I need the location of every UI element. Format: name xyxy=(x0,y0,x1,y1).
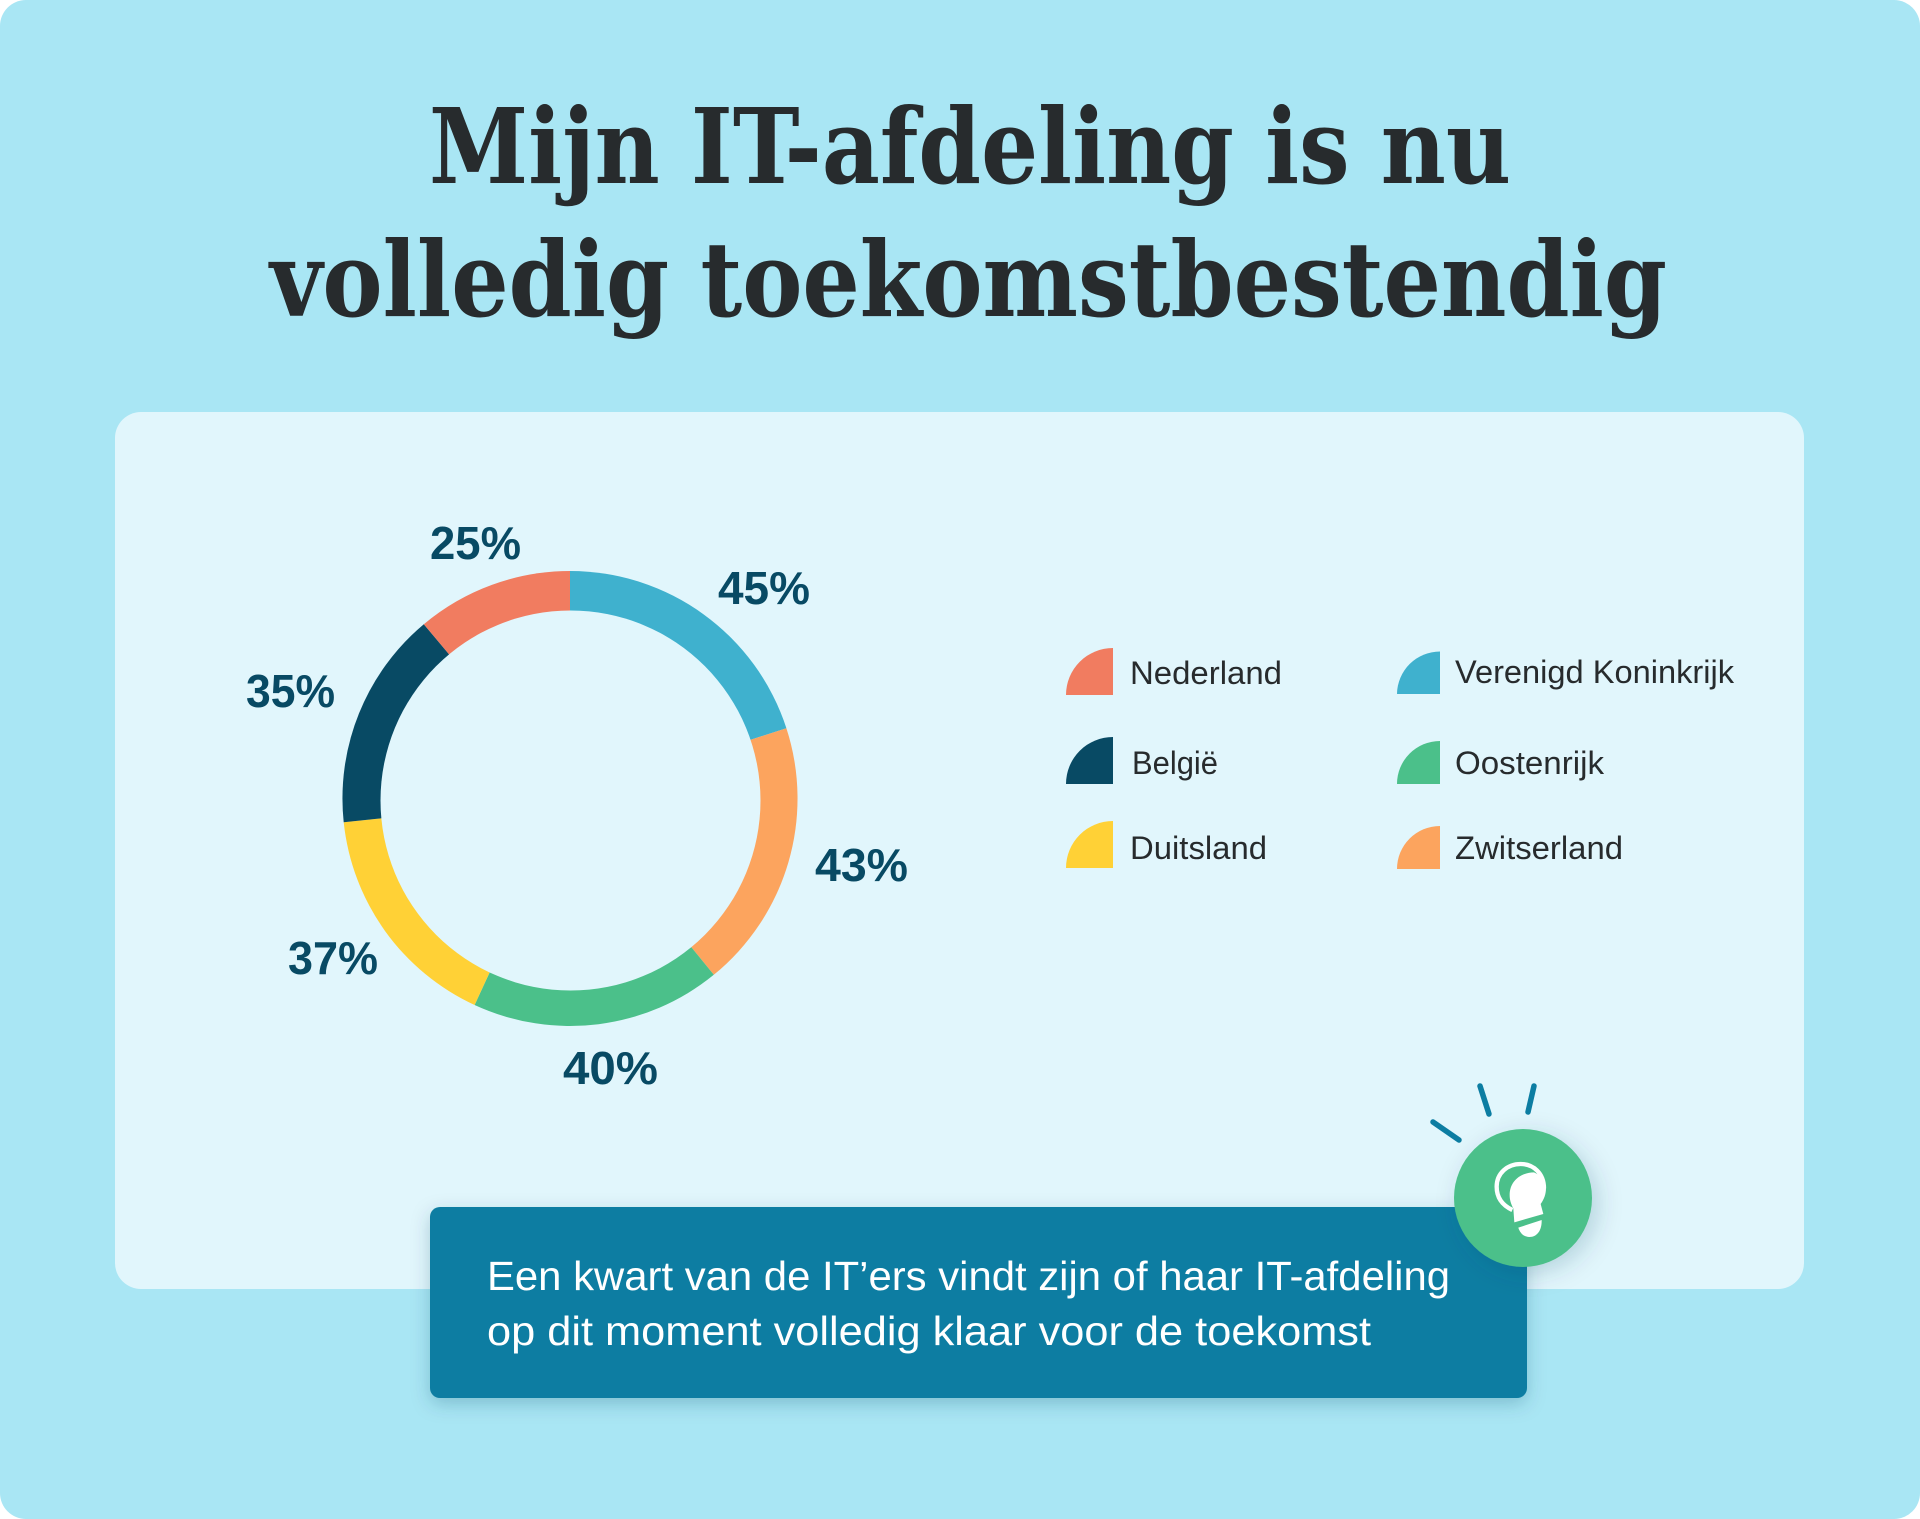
percentage labels: 43% xyxy=(815,839,908,891)
legend item: Duitsland: Duitsland xyxy=(1130,830,1267,866)
segment: Duitsland 37% xyxy=(344,798,570,1005)
segment: Verenigd Koninkrijk 45% xyxy=(570,571,786,798)
segment: Zwitserland 43% xyxy=(570,728,798,975)
callout: Een kwart van de IT’ers vindt zijn of haar IT-afdeling xyxy=(487,1253,1450,1299)
legend item: Oostenrijk: Oostenrijk xyxy=(1455,745,1605,781)
legend xyxy=(1066,648,1735,869)
percentage labels: 40% xyxy=(563,1042,658,1094)
panel: chart and legend xyxy=(115,412,1804,1289)
donut chart xyxy=(342,571,798,1026)
segment: België 35% xyxy=(342,624,570,822)
percentage labels xyxy=(246,517,908,1094)
segment: Oostenrijk 40% xyxy=(475,798,714,1026)
icon: light bulb badge xyxy=(1454,1129,1592,1267)
callout xyxy=(430,1207,1527,1398)
legend item: Zwitserland xyxy=(1397,826,1623,869)
icon: light rays xyxy=(1433,1086,1534,1140)
legend item: Zwitserland: Zwitserland xyxy=(1455,830,1623,866)
percentage labels: 45% xyxy=(718,562,810,614)
percentage labels: 37% xyxy=(288,932,378,984)
segment: Nederland 25% xyxy=(424,571,570,798)
percentage labels: 35% xyxy=(246,665,335,717)
callout: op dit moment volledig klaar voor de toekomst xyxy=(487,1308,1372,1354)
legend item: Oostenrijk xyxy=(1397,741,1605,784)
legend item: Nederland xyxy=(1066,648,1282,695)
title xyxy=(268,85,1667,341)
legend item: Verenigd Koninkrijk: Verenigd Koninkrijk xyxy=(1455,654,1735,690)
legend item: Duitsland xyxy=(1066,821,1267,868)
legend item: België: België xyxy=(1132,745,1218,781)
legend item: België xyxy=(1066,737,1218,784)
legend item: Nederland: Nederland xyxy=(1130,655,1282,691)
legend item: Verenigd Koninkrijk xyxy=(1397,652,1735,694)
title: Mijn IT-afdeling is nu xyxy=(429,85,1511,208)
title: volledig toekomstbestendig xyxy=(268,218,1667,341)
percentage labels: 25% xyxy=(430,517,521,569)
